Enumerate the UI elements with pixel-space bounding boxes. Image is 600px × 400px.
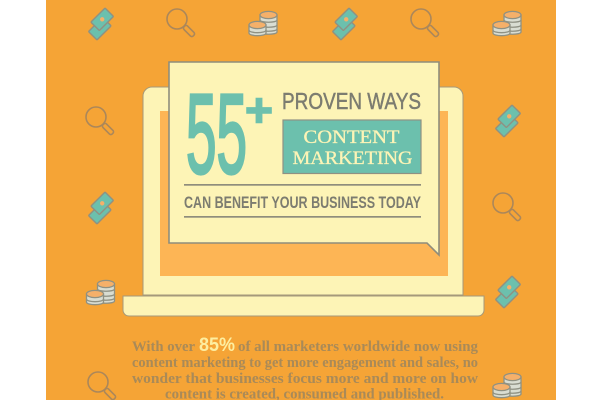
icon: magnifier top left	[167, 9, 195, 37]
heading: proven ways: PROVEN WAYS	[282, 88, 421, 114]
icon: coins bottom right	[493, 373, 521, 398]
icon: coins top left	[249, 11, 277, 36]
headline number 55+: +	[245, 83, 273, 136]
body paragraph	[132, 335, 478, 400]
laptop screen	[160, 111, 448, 276]
body paragraph: wonder that businesses focus more and more on how	[132, 371, 478, 387]
icon: magnifier top right	[411, 9, 439, 37]
badge: content marketing	[283, 120, 421, 174]
body paragraph: 85%	[199, 335, 235, 356]
subheading with rules: CAN BENEFIT YOUR BUSINESS TODAY	[184, 193, 421, 212]
icon: magnifier right middle	[493, 193, 521, 221]
icon: magnifier bottom left	[88, 372, 116, 400]
laptop base	[123, 296, 484, 316]
body paragraph: content marketing to get more engagement and sales, no	[132, 355, 478, 371]
laptop illustration	[123, 87, 484, 316]
icon: money right upper	[495, 105, 521, 137]
body paragraph: of all marketers worldwide now using	[238, 339, 478, 355]
laptop lid	[143, 87, 463, 295]
icon: money right lower	[495, 276, 521, 308]
badge: content marketing: MARKETING	[292, 148, 413, 169]
icon: money top left	[88, 8, 114, 40]
headline number 55+: 55	[186, 71, 247, 197]
icon: coins top right	[493, 11, 521, 36]
icon: money top right	[332, 8, 358, 40]
icon: money left middle	[88, 192, 114, 224]
body paragraph: With over	[132, 339, 195, 355]
icon: coins left lower	[86, 280, 114, 305]
badge: content marketing: CONTENT	[304, 127, 400, 148]
speech bubble	[169, 62, 439, 255]
headline number 55+	[186, 71, 273, 197]
icon: magnifier left upper	[86, 107, 114, 135]
